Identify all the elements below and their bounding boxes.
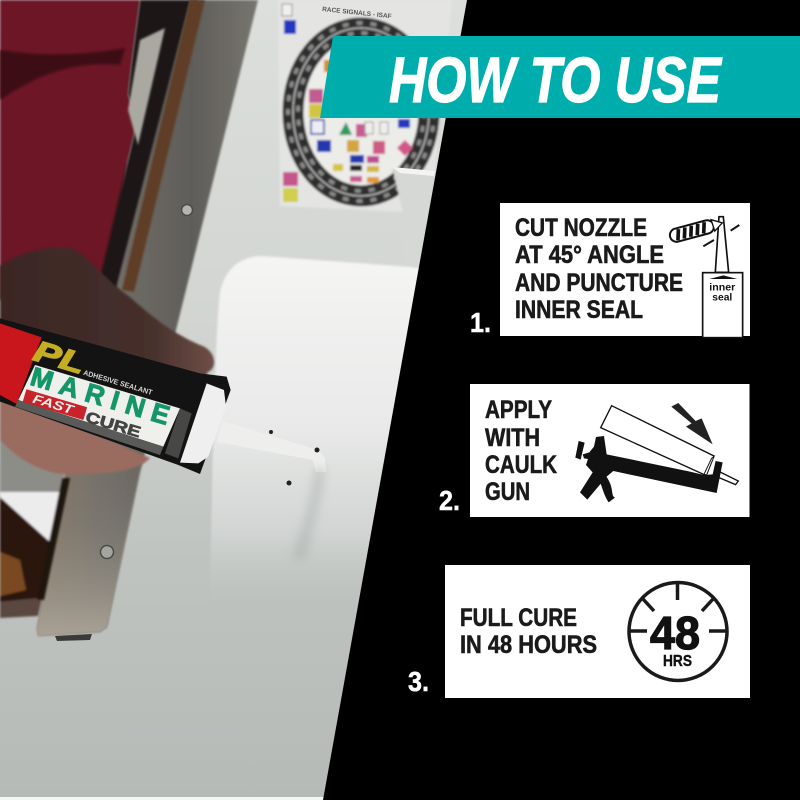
step 2 text [485,396,557,506]
step number 2: 2. [439,485,460,516]
icon: cutting nozzle of cartridge [668,216,743,338]
sealant bead on wall [292,468,325,560]
heading: HOW TO USE [389,44,723,116]
product name text [18,335,181,448]
icon: 48 hours clock [629,582,727,680]
black angled background [323,0,800,800]
step 1 text [515,214,683,324]
step 3 text: IN 48 HOURS [460,631,597,659]
step 2 text: GUN [485,478,530,506]
icon: cutting nozzle of cartridge: inner [709,283,735,294]
step 2 [439,384,750,517]
product name text: FAST [31,392,77,417]
icon: 48 hours clock: HRS [663,653,692,670]
screw lower [100,546,114,558]
product name text: CURE [84,409,143,441]
step 3 [408,565,750,698]
arrow [671,403,713,444]
rivet holes [269,430,320,486]
step 1 card [500,203,750,336]
step 3 card [445,565,750,698]
step 2 text: WITH [485,424,540,452]
race signals chart [278,0,452,212]
wood door frame [37,0,258,636]
sealant cartridge [0,318,231,474]
step 2 text: APPLY [485,396,552,424]
wall bracket [392,168,436,268]
icon: caulk gun with arrow [575,403,738,502]
step 2 text: CAULK [485,451,557,479]
product name text: PL [30,335,89,381]
product name text: MARINE [27,361,173,431]
hand lower fingers [0,395,150,475]
icon: 48 hours clock: 48 [650,607,700,659]
product name text: ADHESIVE SEALANT [82,368,154,397]
step 2 card [470,384,750,517]
step 1 text: CUT NOZZLE [515,214,647,242]
chart title: RACE SIGNALS - ISAF [322,6,392,20]
step 1 [470,203,750,338]
step 1 text: AND PUNCTURE [515,269,683,297]
dark door gap [95,0,198,300]
step 1 text: AT 45° ANGLE [515,241,664,269]
photo: sealant being applied on boat wall [0,0,480,800]
icon: cutting nozzle of cartridge: seal [712,293,733,304]
step number 3: 3. [408,666,429,697]
white rounded panel on wall [210,256,425,600]
white strip at bottom [0,797,330,800]
step number 1: 1. [470,307,491,338]
screw upper [182,204,192,216]
step 3 text: FULL CURE [460,604,577,632]
interior seen through door [0,440,70,618]
step 1 text: INNER SEAL [515,296,643,324]
title banner [320,36,800,118]
red shirt [0,0,140,300]
hand upper [0,247,214,385]
sealant nozzle [217,421,326,472]
step 3 text [460,604,597,659]
